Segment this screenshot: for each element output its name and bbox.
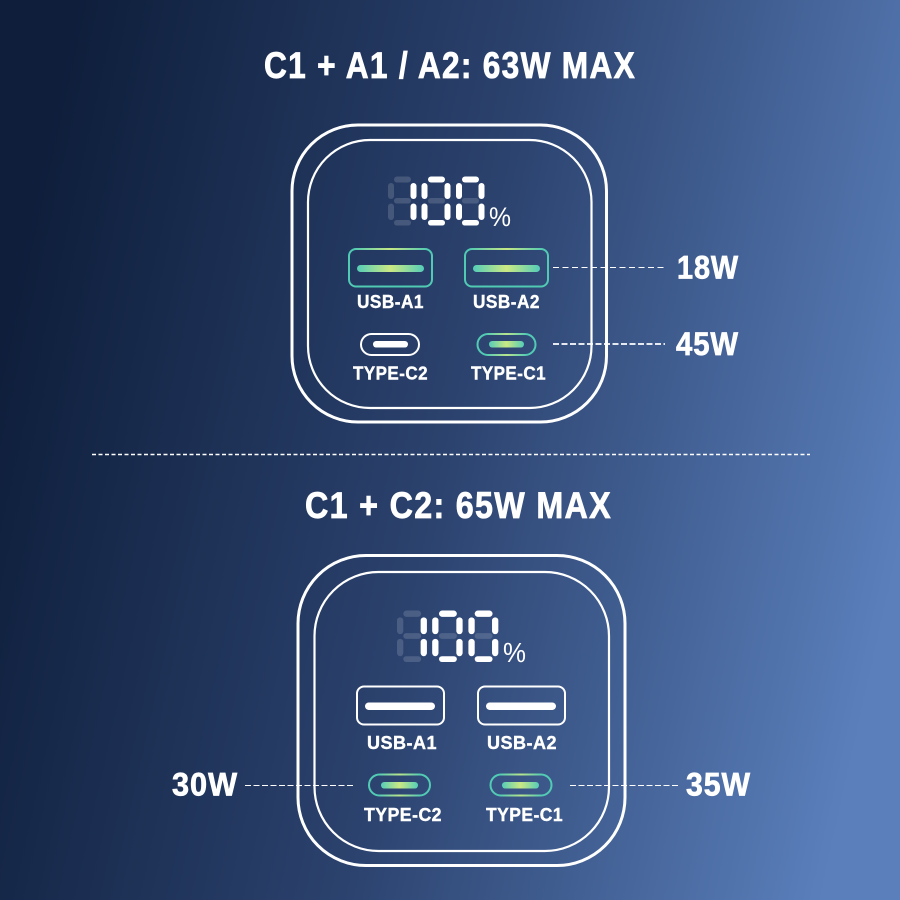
port: TYPE-C1 active [486,774,563,825]
port: USB-A2 idle [478,686,565,753]
battery display 100% [388,176,511,232]
charger body outline [292,125,606,422]
panel: top charger [292,125,606,422]
title: bottom mode: C1 + C2: 65W MAX [305,485,612,526]
port: TYPE-C2 active: TYPE-C2 [364,804,442,825]
port: USB-A1 idle: USB-A1 [367,732,437,753]
port: TYPE-C1 active: TYPE-C1 [486,804,563,825]
dim digit segments [388,176,479,226]
percent sign: % [503,637,526,668]
callout: 30W: 30W [172,766,238,802]
charger body outline [298,556,625,866]
port: USB-A2 active: USB-A2 [473,291,540,312]
port: TYPE-C2 idle: TYPE-C2 [353,362,428,384]
port: USB-A1 active: USB-A1 [357,291,424,312]
percent sign: % [489,202,511,232]
digit segments [397,611,498,662]
port: USB-A2 idle: USB-A2 [487,732,557,753]
port: USB-A1 idle [357,686,444,753]
port: USB-A2 active [465,249,548,312]
charger face outline [308,140,592,408]
charger face outline [314,572,609,851]
port: TYPE-C1 active [471,334,546,384]
battery display 100% [397,611,526,668]
port: TYPE-C1 active: TYPE-C1 [471,362,546,384]
callout: 35W: 35W [686,766,751,802]
port: TYPE-C2 idle [353,334,428,384]
panel: bottom charger [298,556,625,866]
port: USB-A1 active [349,249,432,312]
port: TYPE-C2 active [364,774,442,825]
lit digit segments [410,176,484,226]
callout: 45W: 45W [676,326,739,362]
callout: 18W: 18W [677,250,739,286]
title: top mode: C1 + A1 / A2: 63W MAX [264,45,636,86]
